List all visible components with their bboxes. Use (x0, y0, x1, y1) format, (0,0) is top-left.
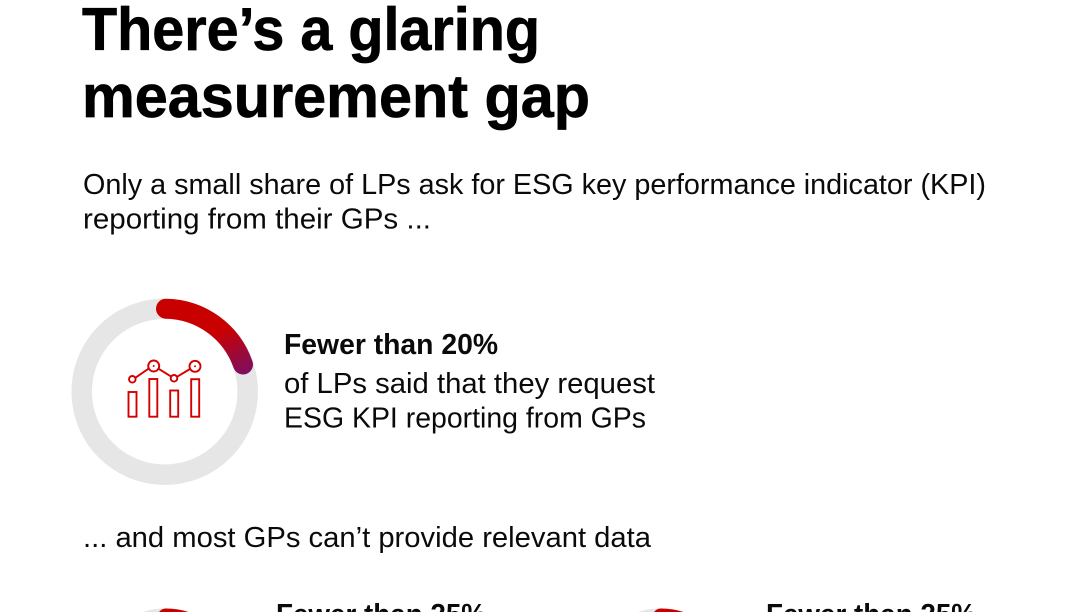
title (82, 0, 590, 130)
icon: bar and line chart (128, 360, 200, 417)
intro text (83, 169, 986, 236)
callout: fewer than 20% of LPs: of LPs said that they request (284, 368, 655, 400)
callout: fewer than 20% of LPs: Fewer than 20% (284, 329, 498, 361)
callout: fewer than 20% of LPs: ESG KPI reporting from GPs (284, 402, 646, 434)
callout: fewer than 20% of LPs (284, 329, 655, 434)
donut chart: fewer than 20% (82, 309, 248, 475)
subheading: ... and most GPs can’t provide relevant data (83, 522, 652, 554)
title: measurement gap (82, 63, 590, 130)
intro text: reporting from their GPs ... (83, 204, 431, 236)
intro text: Only a small share of LPs ask for ESG key performance indicator (KPI) (83, 169, 986, 201)
